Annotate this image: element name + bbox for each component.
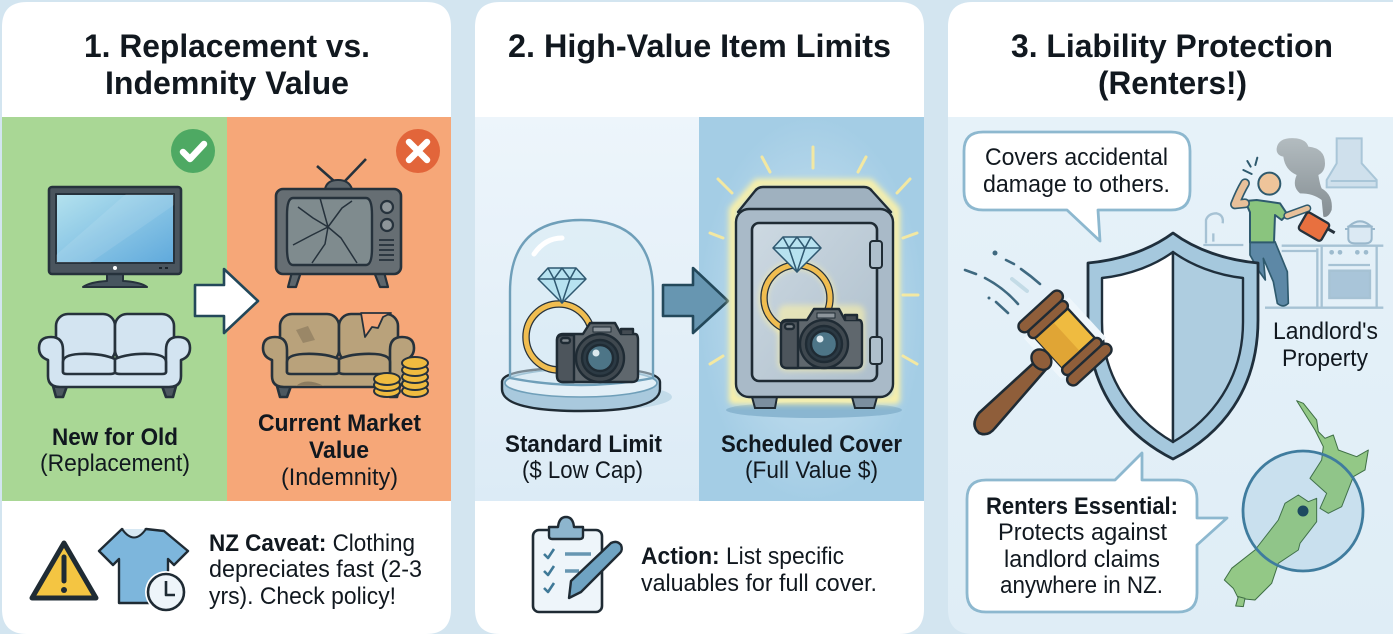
icon: t-shirt with clock <box>99 529 188 613</box>
label: standard limit <box>505 431 662 484</box>
heading: high-value item limits: 2. High-Value Item Limits <box>508 28 891 64</box>
icon: new sofa <box>39 314 190 397</box>
label: scheduled cover <box>721 431 902 484</box>
text: nz caveat: yrs). Check policy! <box>209 583 396 610</box>
callout: covers accidental damage: Covers accidental <box>985 144 1168 171</box>
callout: renters essential: Renters Essential: <box>986 493 1178 520</box>
label: landlord's property: Property <box>1282 345 1368 372</box>
label: current market value: (Indemnity) <box>281 464 398 491</box>
icon: cross mark <box>396 129 440 173</box>
label: landlord's property <box>1274 322 1378 371</box>
panel: replacement vs indemnity <box>2 2 451 634</box>
arrow: replacement to indemnity <box>195 269 258 333</box>
icon: worn old sofa <box>263 313 414 397</box>
label: standard limit: Standard Limit <box>505 431 662 458</box>
icon: check mark <box>171 129 215 173</box>
icon: new flat-screen tv <box>49 187 181 287</box>
heading: replacement vs indemnity <box>84 28 370 101</box>
icon: glow rays <box>710 147 918 364</box>
orange indemnity side background <box>227 117 451 501</box>
green replacement side background <box>2 117 227 501</box>
label: current market value <box>258 410 421 491</box>
label: current market value: Current Market <box>258 410 421 437</box>
heading: replacement vs indemnity: Indemnity Value <box>105 65 349 101</box>
label: landlord's property: Landlord's <box>1273 318 1378 345</box>
callout: covers accidental damage <box>964 132 1190 241</box>
panel: liability protection <box>948 2 1393 634</box>
heading: liability protection: 3. Liability Protection <box>1011 28 1333 64</box>
text: nz caveat: NZ Caveat: Clothing <box>209 530 415 557</box>
icon: safe with valuables <box>726 183 902 418</box>
icon: coin stacks <box>374 357 428 397</box>
icon: new zealand map with coverage circle <box>1224 401 1368 607</box>
label: scheduled cover: Scheduled Cover <box>721 431 902 458</box>
icon: warning triangle <box>32 543 96 598</box>
heading: replacement vs indemnity: 1. Replacement vs. <box>84 28 370 64</box>
text: action: valuables for full cover. <box>641 570 877 597</box>
label: standard limit: ($ Low Cap) <box>522 457 643 484</box>
light standard limit background <box>475 117 699 501</box>
label: new for old: New for Old <box>52 424 178 451</box>
icon: kitchen scene with person and burning pot <box>1203 138 1383 308</box>
callout: renters essential: anywhere in NZ. <box>1000 572 1163 599</box>
label: current market value: Value <box>309 437 369 464</box>
icon: gavel with motion lines <box>965 250 1114 434</box>
callout: renters essential: landlord claims <box>1004 546 1160 573</box>
text: nz caveat <box>209 530 422 610</box>
icon: glass dome with ring and camera <box>502 220 672 411</box>
text: action <box>641 546 875 591</box>
heading: liability protection: (Renters!) <box>1098 65 1247 101</box>
text: action: Action: List specific <box>641 543 844 570</box>
panel: high-value item limits <box>475 2 924 634</box>
blue scheduled cover background <box>699 117 924 501</box>
label: scheduled cover: (Full Value $) <box>745 457 878 484</box>
icon: shield <box>1088 233 1258 459</box>
heading: liability protection <box>1011 28 1333 101</box>
label: new for old: (Replacement) <box>40 450 190 477</box>
callout: covers accidental damage: damage to others. <box>983 171 1170 198</box>
label: new for old <box>40 424 190 477</box>
icon: broken old tv <box>276 159 401 287</box>
text: nz caveat: depreciates fast (2-3 <box>209 556 422 583</box>
arrow: standard to scheduled <box>663 268 728 333</box>
icon: clipboard and pencil <box>533 517 622 612</box>
callout: renters essential <box>967 453 1227 612</box>
callout: renters essential: Protects against <box>998 519 1167 546</box>
